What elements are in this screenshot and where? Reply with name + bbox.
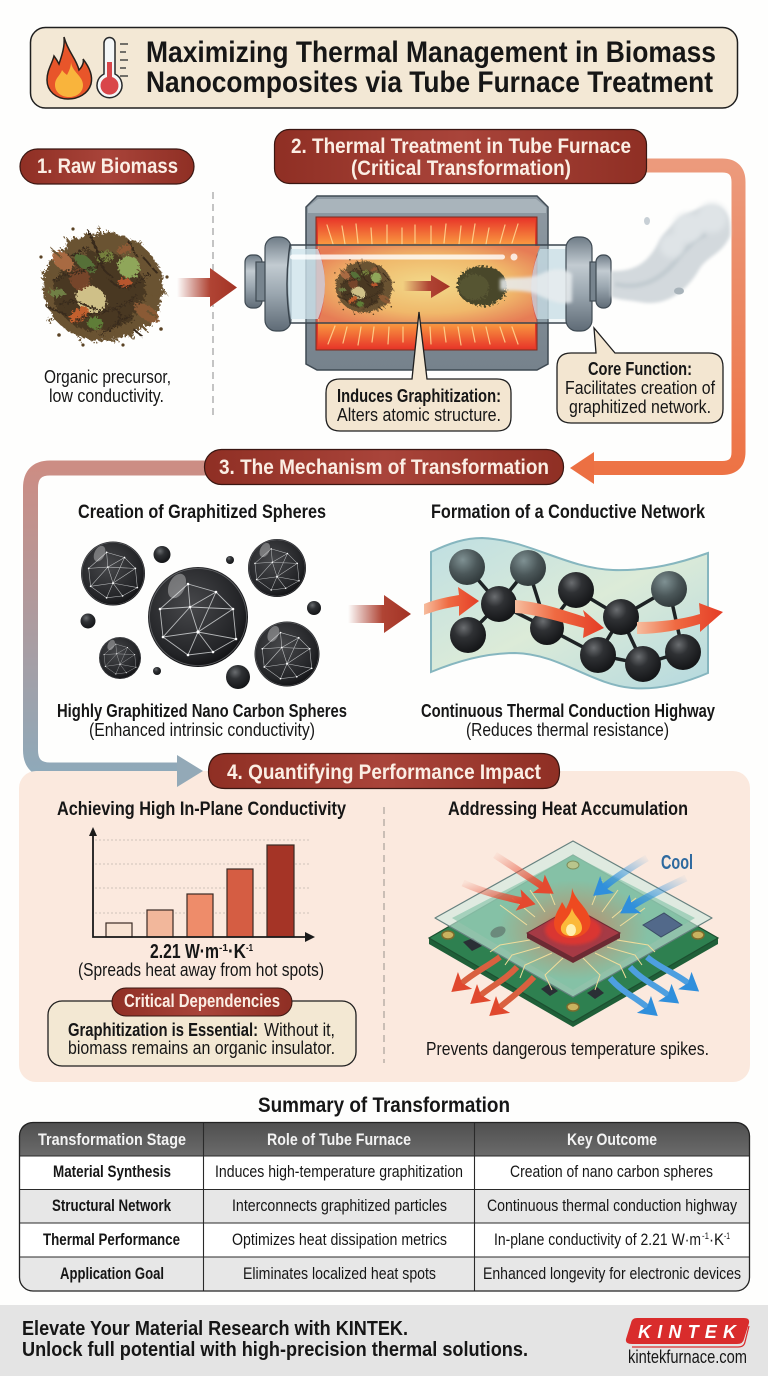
step 3 pill [204,450,564,484]
table header: Key Outcome [567,1130,657,1149]
step 3 pill: 3. The Mechanism of Transformation [219,455,549,479]
callout: critical dependencies: Without it, [264,1019,335,1040]
heading: network: Formation of a Conductive Network [431,501,705,523]
board components [463,938,604,999]
table header: Transformation Stage [38,1130,186,1149]
small capacitor [489,924,507,940]
row: thermal performance [43,1231,730,1249]
furnace body [306,196,548,370]
footer band [0,1305,768,1376]
row: structural network: Structural Network [52,1197,172,1215]
chip on glass right [643,913,682,937]
arrow: spheres to network [348,595,411,633]
title text: Maximizing Thermal Management in Biomass [146,36,716,69]
hot zone [318,246,540,323]
heat caption: Prevents dangerous temperature spikes. [426,1038,709,1059]
critical dependencies pill: Critical Dependencies [124,991,280,1011]
step 1 pill [20,149,194,184]
arrow: biomass to furnace connector [194,158,276,172]
cool label: Cool [661,852,693,874]
biomass caption: Organic precursor, [44,366,171,387]
title text: Nanocomposites via Tube Furnace Treatment [146,66,713,99]
footer call to action [22,1317,528,1361]
conductivity value: -1 [219,943,228,954]
icon: raw biomass pile [39,227,169,347]
row: application goal: Application Goal [60,1265,164,1283]
glass layer [435,841,712,997]
step 4 pill [208,754,560,788]
step 2 pill [274,130,646,184]
icon: thermometer [97,38,128,98]
caption: spheres: Highly Graphitized Nano Carbon Spheres [57,700,347,721]
circuit board heat illustration [429,841,718,1027]
row: thermal performance: -1 [724,1231,730,1241]
row: thermal performance: ·K [709,1231,724,1249]
arrow: furnace to mechanism connector [570,166,738,484]
table header [38,1130,657,1149]
row: application goal [60,1265,741,1283]
graphitized spheres cluster [80,539,321,689]
divider [212,192,214,418]
step 1 pill: 1. Raw Biomass [37,154,178,178]
step 2 pill: 2. Thermal Treatment in Tube Furnace [291,134,631,158]
arrowhead into performance panel [177,755,203,787]
callout: critical dependencies: Graphitization is Essential: [68,1019,258,1040]
arrow inside tube [403,275,450,298]
row: material synthesis: Material Synthesis [53,1163,171,1181]
circuit traces [490,880,655,990]
inner board tint [452,855,695,990]
heading: summary: Summary of Transformation [258,1093,510,1117]
row: thermal performance: Optimizes heat dissipation metrics [232,1231,447,1249]
callout: core function: graphitized network. [569,397,711,417]
smoke [500,203,730,303]
callout: induces graphitization: Alters atomic structure. [337,405,501,425]
biomass caption [44,366,171,406]
conductivity value: ·K [228,941,246,963]
heat glow [498,880,648,980]
conductivity value: -1 [246,943,253,954]
footer call to action: Unlock full potential with high-precision thermal solutions. [22,1338,528,1361]
arrow: into furnace [177,268,237,307]
biomass caption: low conductivity. [49,385,164,406]
conductive network illustration [424,538,723,688]
title text [146,36,716,99]
flame on chip [554,888,591,938]
icon: flame [47,37,92,99]
callout: critical dependencies [48,988,356,1066]
callout: core function [557,328,723,423]
tube furnace [245,196,730,370]
row: thermal performance: Thermal Performance [43,1231,180,1249]
chip [527,907,620,963]
caption: spheres: (Enhanced intrinsic conductivity) [89,719,315,740]
arrows: heat in [463,855,686,906]
callout: core function: Core Function: [588,359,692,379]
step 4 pill: 4. Quantifying Performance Impact [227,760,541,784]
critical dependencies pill [112,988,292,1016]
divider [383,807,385,1063]
step 2 pill: (Critical Transformation) [351,156,571,180]
arrows: heat out [462,957,688,1007]
KINTEK logo [626,1318,749,1347]
bar chart [89,827,315,942]
callout: induces graphitization: Induces Graphitization: [337,386,501,406]
glass tube [287,245,573,323]
biomass inside tube [334,259,395,315]
footer call to action: Elevate Your Material Research with KINTEK. [22,1317,408,1340]
KINTEK logo: KINTEK [638,1322,738,1342]
caption: spheres [57,700,347,740]
flow arrows [424,587,723,638]
glass sheet [431,538,708,688]
heading: conductivity: Achieving High In-Plane Conductivity [57,798,346,820]
heading: spheres: Creation of Graphitized Spheres [78,501,326,523]
row: material synthesis: Creation of nano carbon spheres [510,1163,713,1181]
callout: critical dependencies: biomass remains an organic insulator. [68,1037,335,1058]
row: material synthesis: Induces high-temperature graphitization [215,1163,463,1181]
table header: Role of Tube Furnace [267,1130,411,1149]
conductivity caption: (Spreads heat away from hot spots) [78,959,324,980]
conductivity value: 2.21 W·m [150,941,219,963]
left flanges [245,237,291,331]
callout: core function: Facilitates creation of [565,378,716,398]
right flanges [566,237,611,331]
row: structural network [52,1197,738,1215]
row: structural network: Interconnects graphitized particles [232,1197,447,1215]
row: application goal: Eliminates localized heat spots [243,1265,436,1283]
caption: network [421,700,716,740]
summary table [20,1122,750,1291]
caption: network: (Reduces thermal resistance) [466,719,669,740]
row: thermal performance: In-plane conductivity of 2.21 W·m [494,1231,701,1249]
arrow: mechanism to performance connector [30,468,206,770]
row: thermal performance: -1 [702,1231,709,1241]
title banner [30,28,738,108]
row: material synthesis [53,1163,713,1181]
heading: heat accumulation: Addressing Heat Accumulation [448,798,688,820]
graphitized char [457,266,507,306]
panel: performance impact [19,771,750,1082]
callout: induces graphitization [326,312,511,431]
board [429,938,718,1027]
